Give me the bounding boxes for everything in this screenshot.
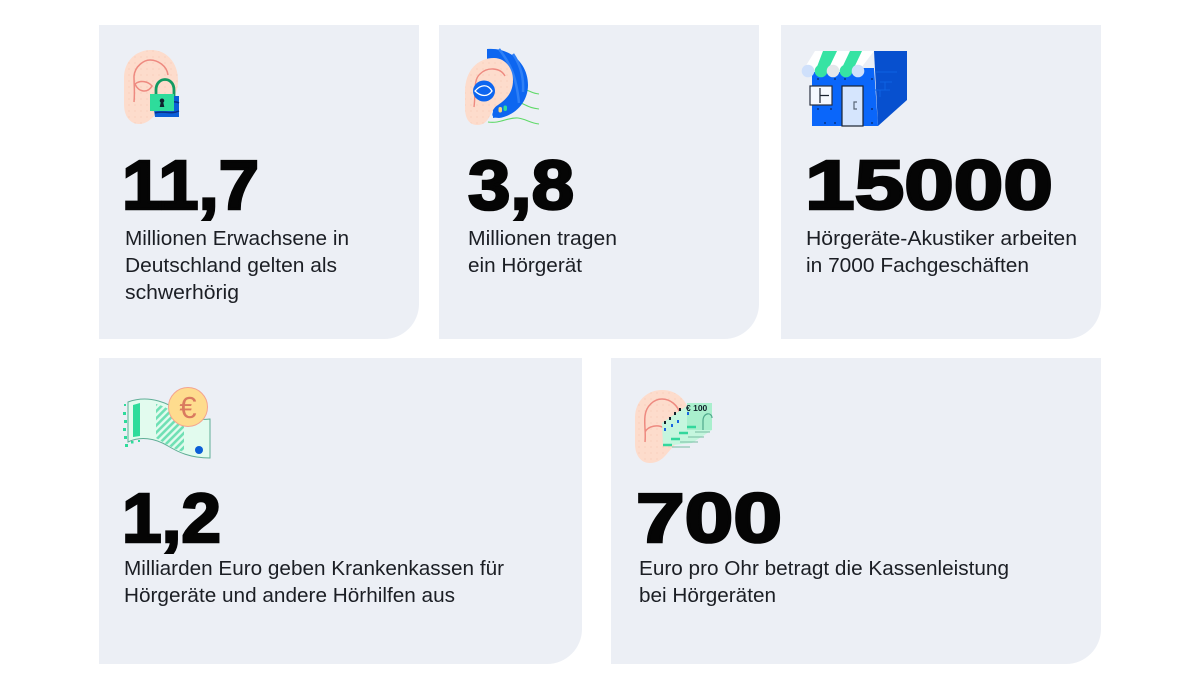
text: Erwachsene: schwerhörig <box>125 282 239 304</box>
icon: shop <box>802 51 907 126</box>
text: Träger: Millionen tragen <box>468 228 617 250</box>
text: Kassenleistung: bei Hörgeräten <box>639 585 776 607</box>
number: 11,7: 11,7 <box>122 146 259 224</box>
panel: Kassenleistung <box>611 358 1101 664</box>
panel: Akustiker <box>781 25 1101 339</box>
icon: ear with padlock <box>124 50 179 124</box>
text: Akustiker: in 7000 Fachgeschäften <box>806 255 1029 277</box>
icon: ear with hearing aid <box>465 49 539 125</box>
number: 700: 700 <box>636 479 782 557</box>
icon: banknote with euro coin <box>123 388 210 458</box>
text: Erwachsene <box>125 228 349 304</box>
text: Träger: ein Hörgerät <box>468 255 582 277</box>
panel: Krankenkassen <box>99 358 582 664</box>
text: Kassenleistung <box>639 558 1009 607</box>
text: Erwachsene: Deutschland gelten als <box>125 255 337 277</box>
number: 3,8: 3,8 <box>468 146 574 224</box>
number: 1,2: 1,2 <box>122 479 221 557</box>
text: Krankenkassen <box>124 558 504 607</box>
text: Erwachsene: Millionen Erwachsene in <box>125 228 349 250</box>
icon: ear with banknotes: € 100 <box>686 403 708 413</box>
number: 15000: 15000 <box>805 146 1053 224</box>
text: Krankenkassen: Milliarden Euro geben Krankenkassen für <box>124 558 504 580</box>
text: Akustiker <box>806 228 1077 277</box>
panel: Schwerhörige Erwachsene <box>99 25 419 339</box>
text: Kassenleistung: Euro pro Ohr betragt die Kassenleistung <box>639 558 1009 580</box>
icon: ear with banknotes <box>635 390 712 463</box>
panel: Hörgeräte-Träger <box>439 25 759 339</box>
text: Träger <box>468 228 617 277</box>
icon: banknote with euro coin: € <box>179 390 197 425</box>
text: Akustiker: Hörgeräte-Akustiker arbeiten <box>806 228 1077 250</box>
text: Krankenkassen: Hörgeräte und andere Hörhilfen aus <box>124 585 455 607</box>
